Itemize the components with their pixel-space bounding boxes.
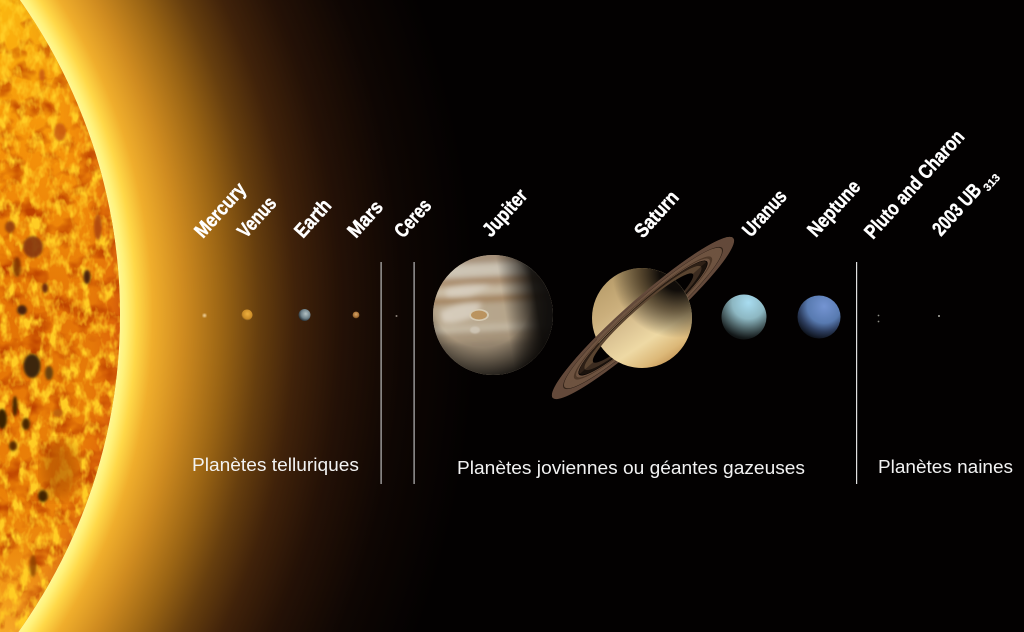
planet: Uranus [722, 294, 766, 340]
planet: Mars [353, 312, 359, 318]
divider: Ceres / giants [414, 262, 415, 484]
label: 2003 UB313: 313 [981, 172, 1003, 194]
label: Jupiter: Jupiter [478, 185, 532, 241]
planet: Mercury [203, 314, 206, 317]
label: Neptune: Neptune [803, 176, 865, 241]
group heading: gas giants: Planètes joviennes ou géantes gazeuses [457, 458, 805, 478]
label: Mercury: Mercury [190, 178, 251, 242]
dwarf planet: 2003 UB313 [938, 315, 940, 317]
planet: Earth [298, 309, 310, 321]
divider: terrestrial / Ceres [380, 262, 382, 484]
planet: Venus [242, 310, 252, 320]
group heading: dwarf planets: Planètes naines [878, 457, 1013, 477]
label: Uranus: Uranus [738, 186, 792, 241]
rings front half [552, 236, 733, 398]
sunspots [0, 69, 102, 577]
planet: Neptune [798, 296, 840, 338]
storm swirls [440, 285, 492, 323]
label: Earth: Earth [290, 195, 336, 242]
planet: Jupiter [433, 255, 553, 375]
label: Pluto and Charon: Pluto and Charon [860, 126, 969, 243]
dark swirl region [42, 442, 78, 498]
planet: Ceres [396, 315, 398, 317]
planet: Saturn [552, 236, 734, 400]
rings back half [547, 230, 739, 406]
label: Venus: Venus [233, 193, 281, 242]
label: 2003 UB313: 2003 UB [928, 180, 986, 240]
dwarf planet: Pluto and Charon [878, 315, 879, 322]
label: Mars: Mars [343, 196, 388, 242]
label: Ceres: Ceres [390, 195, 436, 242]
label: Saturn: Saturn [630, 187, 684, 242]
group heading: terrestrial planets: Planètes telluriques [192, 455, 359, 475]
great red spot [469, 309, 489, 321]
divider: giants / dwarfs [856, 262, 857, 484]
sun [0, 0, 125, 632]
